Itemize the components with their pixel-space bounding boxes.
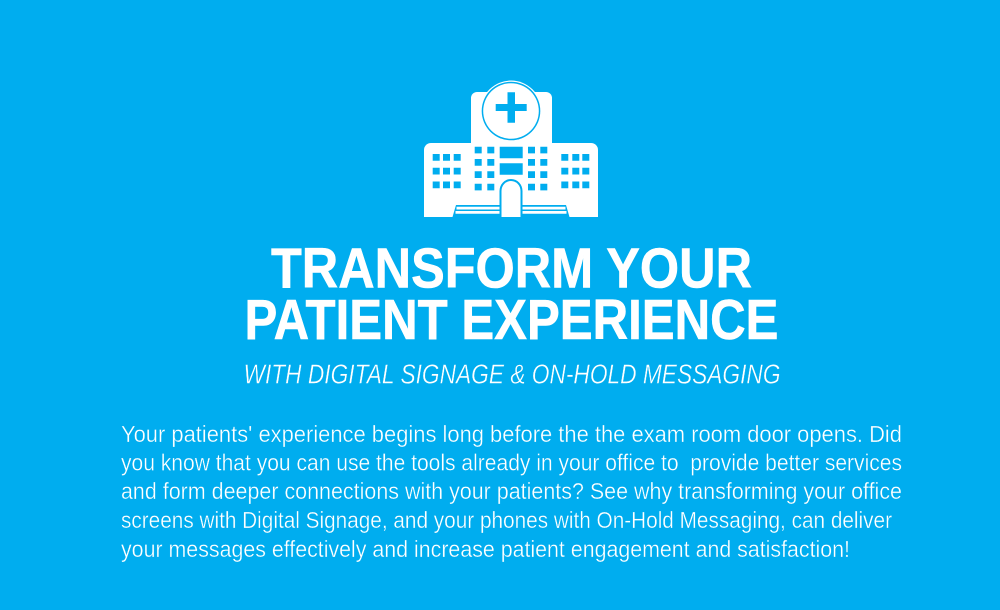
- medical cross emblem: [480, 80, 542, 142]
- intro paragraph: Your patients' experience begins long before the the exam room door opens. Did: [121, 421, 902, 447]
- title line 1: TRANSFORM YOUR: [271, 236, 752, 300]
- subtitle: WITH DIGITAL SIGNAGE & ON-HOLD MESSAGING: [244, 358, 780, 390]
- centre panels: [500, 147, 523, 175]
- hospital main block: [424, 143, 598, 217]
- entrance steps: [452, 205, 570, 217]
- intro paragraph: your messages effectively and increase patient engagement and satisfaction!: [121, 536, 850, 562]
- title line 2: PATIENT EXPERIENCE: [244, 288, 778, 351]
- icon: hospital building: [424, 80, 598, 217]
- title: [244, 236, 778, 351]
- intro paragraph: and form deeper connections with your patients? See why transforming your office: [121, 478, 902, 504]
- intro paragraph: you know that you can use the tools already in your office to provide better services: [121, 450, 902, 476]
- centre right windows: [528, 147, 547, 190]
- centre left windows: [475, 147, 494, 190]
- right wing windows: [561, 154, 589, 188]
- intro paragraph: screens with Digital Signage, and your phones with On-Hold Messaging, can deliver: [121, 507, 892, 533]
- left wing windows: [433, 154, 461, 188]
- entrance door: [500, 179, 522, 217]
- hospital tower: [471, 92, 552, 143]
- intro paragraph: [121, 421, 902, 562]
